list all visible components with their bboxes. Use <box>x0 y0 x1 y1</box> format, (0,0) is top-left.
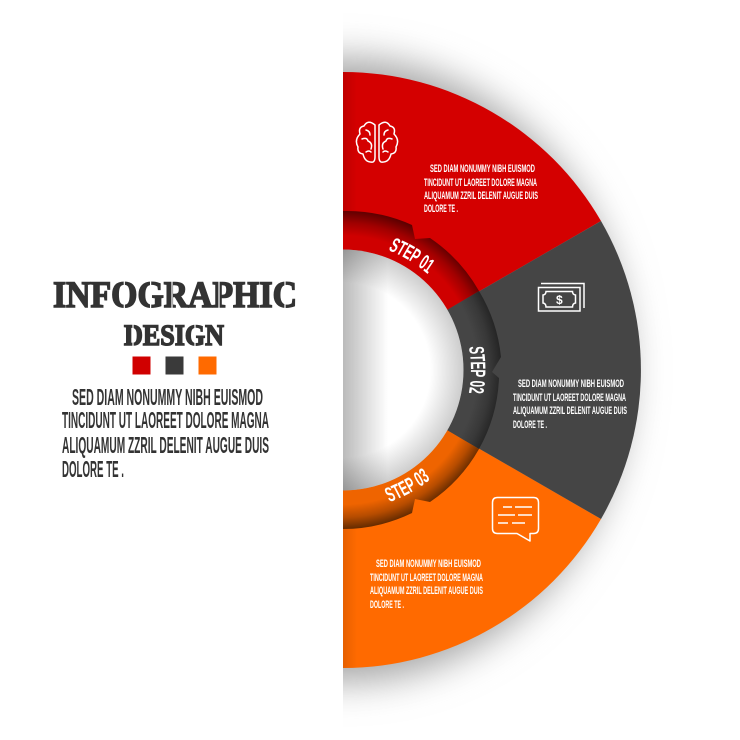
text: step 03 description: ALIQUAMUM ZZRIL DELENIT AUGUE DUIS <box>370 585 483 597</box>
label: step 02: STEP 02 <box>468 346 486 394</box>
text: step 02 description: ALIQUAMUM ZZRIL DELENIT AUGUE DUIS <box>513 405 627 417</box>
text: TINCIDUNT UT LAOREET DOLORE MAGNA <box>62 407 269 433</box>
label: step 03: STEP 03 <box>384 468 429 502</box>
icon: banknote: $ <box>556 293 563 307</box>
text: intro paragraph <box>62 384 269 482</box>
icon: banknote <box>538 284 584 311</box>
text: step 02 description: DOLORE TE . <box>513 419 547 431</box>
ring segment: step 01 <box>343 211 479 320</box>
ring segment: step 03 <box>343 420 479 529</box>
text: step 02 description <box>513 378 627 431</box>
text: step 02 description: SED DIAM NONUMMY NIBH EUISMOD <box>518 378 624 390</box>
text: step 01 description <box>424 163 538 215</box>
center hole <box>343 250 464 490</box>
title: INFOGRAPHIC <box>53 275 297 316</box>
text: step 02 description: TINCIDUNT UT LAOREET DOLORE MAGNA <box>513 392 626 404</box>
text: step 01 description: ALIQUAMUM ZZRIL DELENIT AUGUE DUIS <box>424 190 538 202</box>
panel: step 01 red sector <box>343 72 601 370</box>
text: ALIQUAMUM ZZRIL DELENIT AUGUE DUIS <box>62 432 269 458</box>
text: intro paragraph: DOLORE TE . <box>62 456 124 482</box>
text: step 03 description: SED DIAM NONUMMY NIBH EUISMOD <box>376 558 481 570</box>
text: step 03 description <box>370 558 483 611</box>
text: SED DIAM NONUMMY NIBH EUISMOD <box>72 384 263 410</box>
text: step 01 description: DOLORE TE . <box>424 203 458 215</box>
icon: brain <box>356 122 398 162</box>
text: step 01 description: SED DIAM NONUMMY NIBH EUISMOD <box>430 163 535 175</box>
panel: step 03 orange sector <box>343 370 601 668</box>
background shadow of the wheel <box>58 58 628 682</box>
left white panel <box>0 0 343 740</box>
ring segment: step 02 <box>420 291 501 449</box>
text: step 01 description: TINCIDUNT UT LAOREET DOLORE MAGNA <box>424 177 537 189</box>
panel: step 02 gray sector <box>343 221 641 519</box>
text: step 03 description: DOLORE TE . <box>370 599 404 611</box>
colour legend squares <box>132 356 216 374</box>
text: TINCIDUNT UT LAOREET DOLORE MAGNA <box>370 572 483 584</box>
icon: chat bubble <box>492 498 538 541</box>
label: step 01: STEP 01 <box>390 238 434 274</box>
title <box>53 275 297 352</box>
title: DESIGN <box>124 319 224 352</box>
